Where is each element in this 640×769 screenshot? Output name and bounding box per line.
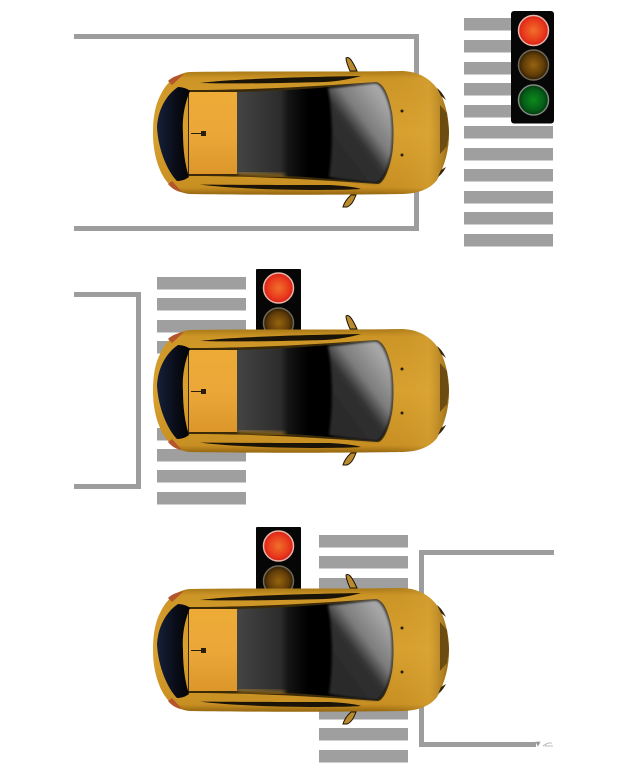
scene 2: car past the stop line, light above (74, 269, 449, 504)
roof edge glow (238, 173, 285, 176)
front grille and headlights (440, 105, 449, 154)
panel handle (191, 389, 206, 394)
hood dots (400, 626, 404, 630)
rear window (157, 87, 190, 181)
glass roof frame (188, 82, 394, 184)
front grille and headlights (440, 622, 449, 671)
yellow roof panel (189, 350, 237, 432)
traffic light 2 (256, 269, 301, 339)
crosswalk 1 (464, 18, 553, 246)
dark glass roof (237, 83, 392, 183)
tail lights (168, 332, 184, 450)
yellow roof panel (189, 92, 237, 174)
mirrors (343, 58, 357, 207)
scene 3: car on the crosswalk, light above (153, 527, 554, 762)
car 2 (153, 316, 449, 465)
windshield reflection (328, 600, 392, 700)
hood highlight (380, 71, 449, 194)
hood dots (400, 110, 404, 112)
car 1 (153, 58, 449, 207)
windshield reflection (328, 83, 392, 183)
watermark mark (536, 742, 553, 746)
windshield reflection (328, 341, 392, 441)
lane bracket 1 (74, 36, 416, 228)
mirrors (343, 316, 357, 465)
hood dots (400, 368, 404, 370)
traffic light 1 (511, 11, 554, 124)
scene 1: car crossing the stop box, crosswalk ahead (74, 11, 554, 246)
dark glass roof (237, 600, 392, 700)
rear window (157, 345, 190, 439)
roof edge glow (238, 431, 285, 434)
tail lights (168, 74, 184, 192)
side strips (200, 593, 361, 707)
car body (153, 71, 449, 195)
panel handle (191, 131, 206, 136)
crosswalk 3 (319, 535, 408, 762)
side strips (200, 76, 361, 190)
dark glass roof (237, 341, 392, 441)
hood highlight (380, 588, 449, 711)
hood highlight (380, 329, 449, 452)
traffic light 3 (256, 527, 301, 597)
glass roof frame (188, 599, 394, 701)
yellow roof panel (189, 609, 237, 691)
tail lights (168, 591, 184, 709)
side strips (200, 334, 361, 448)
car 3 (153, 575, 449, 724)
glass roof frame (188, 340, 394, 442)
car body (153, 588, 449, 712)
rear window (157, 604, 190, 698)
lane bracket 3 (422, 552, 554, 744)
crosswalk 2 (157, 277, 246, 504)
front grille and headlights (440, 363, 449, 412)
roof edge glow (238, 690, 285, 693)
mirrors (343, 575, 357, 724)
panel handle (191, 648, 206, 653)
lane bracket 2 (74, 294, 138, 486)
car body (153, 329, 449, 453)
